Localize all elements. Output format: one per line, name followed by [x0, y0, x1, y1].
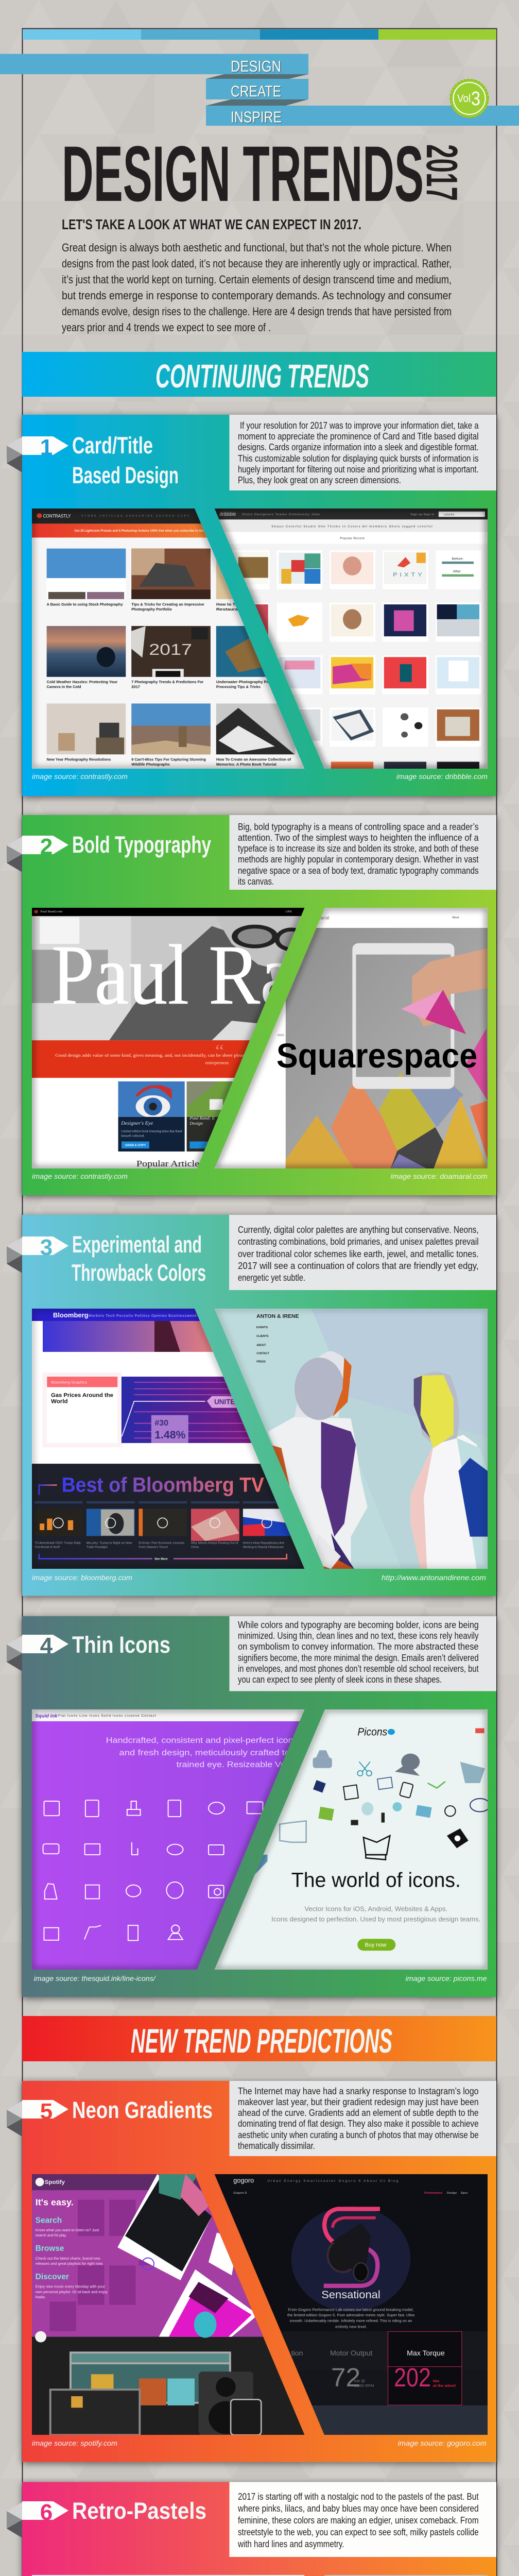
screenshot: contrastly cards: Get 25 Lightroom Presets and 5 Photoshop Actions 100% free when you subscribe to the: [75, 529, 204, 533]
screenshot: picons the world of icons: Vector Icons for iOS, Android, Websites & Apps.: [304, 1905, 447, 1913]
screenshot: bloomberg: Working to Repeal Obamacare: [243, 1546, 284, 1549]
screenshot: anton and irene: ANTON & IRENE: [256, 1313, 299, 1319]
screenshot: gogoro: Spec: [461, 2192, 469, 2195]
screenshot: picons the world of icons: [211, 1709, 490, 1970]
text box 1: Plus, they look great on any screen dimensions.: [238, 475, 401, 485]
screenshot: doamaral squarespace: Work: [452, 917, 459, 920]
arrow: number 5: 5: [40, 2099, 53, 2124]
arrow: number 2: [22, 834, 68, 859]
screenshot: bloomberg: China: [191, 1546, 199, 1549]
banner: continuing trends: [22, 352, 496, 397]
text box 3: energetic yet subtle.: [238, 1273, 305, 1283]
text box 6: where pinks, lilacs, and baby blues may once have been considered: [237, 2503, 479, 2514]
ribbon: design create inspire: DESIGN: [231, 58, 281, 75]
screenshot: bloomberg: [32, 1309, 310, 1569]
screenshot: teletype: [32, 2575, 306, 2576]
text box 3: Currently, digital color palettes are anything but conservative. Neons,: [238, 1225, 479, 1235]
text box 2: [230, 815, 496, 890]
heading 3: Throwback Colors: [72, 1260, 206, 1286]
screenshot: gogoro: From Gogoro Performance Lab comes our latest ground breaking model,: [288, 2307, 414, 2312]
screenshot: gogoro: Nm: [433, 2379, 440, 2383]
screenshot: bloomberg: 1.48%: [154, 1429, 186, 1441]
screenshot: bloomberg: UNITE: [214, 1398, 235, 1406]
arrow: number 4: 4: [40, 1633, 53, 1658]
banner: continuing trends: CONTINUING TRENDS: [155, 358, 369, 395]
text box 5: The Internet may have had a snarky response to Instagram’s logo: [238, 2086, 479, 2096]
text box 4: you can expect to see plenty of sleek icons in these shapes.: [238, 1674, 442, 1685]
text box 3: 2017 will see a continuation of colors that are friendly yet edgy,: [238, 1261, 479, 1271]
arrow: number 3: [22, 1235, 68, 1260]
text box 1: [230, 415, 496, 490]
screenshot: paul rand: himself collected.: [121, 1134, 145, 1138]
arrow: number 6: [22, 2500, 68, 2525]
icon: fold 4: [7, 1636, 22, 1671]
heading 2: Bold Typography: [72, 832, 211, 858]
text box 2: its canvas.: [238, 876, 274, 887]
screenshot: dribbble shots: Popular Recent: [340, 537, 365, 540]
screenshot: dribbble shots: Sign up Sign in: [410, 513, 434, 516]
screenshot: spotify: own personal playlist. Or sit back and enjoy: [36, 2291, 108, 2294]
text box 1: designs. Cards organize information into a sleek and digestible format.: [238, 442, 479, 452]
icon: fold 2: [7, 837, 22, 872]
panel: trend 2 bold typography: [7, 815, 496, 1195]
screenshot: bloomberg: Bloomberg Graphics: [51, 1380, 87, 1384]
screenshot: paul rand: Paul Rand.com: [40, 910, 63, 913]
screenshot: paul rand: entrepreneur.: [205, 1060, 230, 1065]
text box 1: moment to appreciate the prominence of Card and Title based digital: [238, 431, 479, 442]
screenshot: picons the world of icons: Picons: [357, 1725, 387, 1738]
text box 3: over traditional color schemes like earth, jewel, and metallic tones.: [238, 1249, 479, 1259]
text box 4: While colors and typography are becoming bolder, icons are being: [238, 1620, 479, 1630]
screenshot: paul rand: Designer's Eye: [120, 1121, 153, 1126]
screenshot: bloomberg: El-Erian: Five Economic Lessons: [139, 1542, 184, 1545]
text box 6: with hard lines and asymmetry.: [237, 2539, 344, 2549]
screenshot: paul rand: Paul Rand: E: [189, 1116, 215, 1121]
screenshot: spotify: Radio.: [36, 2296, 46, 2299]
arrow: number 4: [22, 1633, 68, 1658]
screenshot: gogoro: Sensational: [321, 2289, 380, 2301]
screenshot: paul rand: “: [215, 1041, 224, 1061]
screenshot: bloomberg: Here's How Republicans Are: [243, 1542, 284, 1545]
heading 5: Neon Gradients: [72, 2097, 213, 2123]
screenshot: paul rand: Design: [189, 1121, 203, 1126]
screenshot: contrastly cards: Processing Tips & Tricks: [216, 685, 261, 689]
screenshot: moglea: [324, 2575, 488, 2576]
text box 5: [230, 2081, 496, 2156]
screenshot: doamaral squarespace: 2016: [278, 1034, 284, 1037]
screenshot: spotify: Premium: [179, 2181, 193, 2184]
screenshot: dribbble shots: Shots Designers Teams Community Jobs: [242, 513, 320, 516]
caption left 5: image source: spotify.com: [32, 2439, 117, 2447]
caption right 2: image source: doamaral.com: [390, 1172, 488, 1180]
screenshot: doamaral squarespace: aral: [320, 916, 329, 921]
screenshot: picons the world of icons: The world of icons.: [291, 1869, 461, 1891]
screenshot: contrastly cards: Photography Portfolio: [131, 607, 172, 612]
screenshot: spotify: Enjoy new music every Monday with your: [36, 2285, 105, 2289]
arrow: number 1: [22, 435, 68, 460]
screenshot: anton and irene: [211, 1309, 489, 1569]
screenshot: paul rand: Popular Article: [136, 1159, 199, 1168]
screenshot: squid ink line icons: Flat Icons Line Icons Solid Icons License Contact: [58, 1714, 156, 1718]
screenshot: dribbble shots: dribbble: [219, 512, 236, 517]
arrow: number 1: 1: [40, 435, 53, 460]
screenshot: bloomberg: World: [51, 1399, 68, 1405]
screenshot: gogoro: [211, 2174, 490, 2435]
title: 2017: [417, 144, 466, 201]
screenshot: spotify: releases and great playlists for right now.: [36, 2262, 103, 2266]
screenshot: paul rand: Paul Ra: [51, 928, 295, 1023]
screenshot: bloomberg: Markets Tech Pursuits Politics Opinion Businessweek: [89, 1314, 197, 1318]
caption right 5: image source: gogoro.com: [398, 2439, 487, 2447]
screenshot: contrastly cards: Wildlife Photographs: [131, 762, 170, 767]
screenshot: contrastly cards: New Year Photography Resolutions: [47, 757, 111, 761]
screenshot: gogoro: smooth. Unbelievably nimble. Infinitely more refined. This is riding on an: [290, 2318, 412, 2323]
screenshot: squid ink line icons: trained eye. Resizeable Ve: [177, 1760, 286, 1769]
heading 1: [72, 432, 179, 488]
text box 2: Big, bold typography is a means of controlling space and a reader’s: [238, 822, 479, 832]
subtitle: LET'S TAKE A LOOK AT WHAT WE CAN EXPECT IN 2017.: [62, 216, 361, 232]
screenshot: contrastly cards: Underwater Photography Post: [216, 680, 273, 684]
screenshot: doamaral squarespace: Squarespace: [276, 1037, 477, 1075]
screenshot: anton and irene: ABOUT: [256, 1344, 266, 1347]
screenshot: bloomberg: Why Money Keeps Flowing Out of: [191, 1542, 238, 1545]
text box 5: dominating trend of flat design. They also make it possible to achieve: [238, 2119, 479, 2129]
screenshot: bloomberg: Bloomberg: [53, 1311, 89, 1319]
intro text: but trends emerge in response to contemporary demands. As technology and consumer: [62, 289, 452, 302]
screenshot: contrastly cards: 2017: [149, 640, 192, 658]
screenshot: spotify: Search: [36, 2216, 62, 2225]
screenshot: gogoro: 72: [331, 2363, 360, 2392]
screenshot: gogoro: kW @: [354, 2379, 365, 2383]
heading 1: Based Design: [72, 462, 179, 488]
screenshot: gogoro: Gogoro S: [233, 2192, 247, 2195]
screenshot: gogoro: tion: [291, 2349, 303, 2357]
screenshot: contrastly cards: How To Create an Awesome Collection of: [216, 757, 291, 761]
screenshot: picons the world of icons: Icons designed to perfection. Used by most prestigious design teams.: [271, 1916, 480, 1923]
icon: fold 5: [7, 2101, 22, 2137]
caption left 2: image source: contrastly.com: [32, 1172, 128, 1180]
screenshot: anton and irene: CONTACT: [256, 1352, 270, 1355]
heading 1: Card/Title: [72, 432, 153, 459]
screenshot: bloomberg: Gas Prices Around the: [51, 1393, 113, 1399]
text box 5: makeover last year, but their gradient redesign may just have been: [238, 2097, 479, 2107]
screenshot: contrastly cards: How to Take: [216, 602, 243, 606]
screenshot: contrastly cards: Camera in the Cold: [47, 685, 81, 689]
caption right 3: http://www.antonandirene.com: [382, 1573, 486, 1582]
text box 4: [230, 1616, 496, 1691]
screenshot: gogoro: Motor Output: [330, 2349, 373, 2357]
screenshot: paul rand: GRAB A COPY: [125, 1144, 146, 1147]
ribbon: design create inspire: [0, 54, 519, 126]
text box 6: streetstyle to the web, you can expect to see soft, milky pastels collide: [238, 2527, 479, 2537]
ribbon: design create inspire: CREATE: [231, 82, 281, 100]
screenshot: paul rand: [32, 908, 308, 1168]
text box 3: [229, 1215, 496, 1290]
arrow: number 6: 6: [40, 2500, 53, 2525]
icon: fold 1: [7, 437, 22, 472]
screenshot: contrastly cards: CONTRASTLY: [43, 514, 71, 519]
screenshot: spotify: [32, 2174, 310, 2435]
text box 2: negative space or a sea of body text, dramatic typography commands: [238, 866, 479, 876]
arrow: number 2: 2: [40, 834, 53, 859]
arrow: number 5: [22, 2099, 68, 2124]
screenshot: bloomberg: #30: [154, 1419, 168, 1428]
icon: fold 3: [7, 1238, 22, 1273]
screenshot: contrastly cards: A Basic Guide to using Stock Photography: [47, 602, 123, 606]
panel: trend 3 experimental and throwback colors: [7, 1215, 496, 1596]
intro text: [62, 241, 452, 334]
text box 5: thematically dissimilar.: [238, 2141, 315, 2151]
text box 1: This customizable solution for displaying quick bursts of information is: [238, 453, 479, 464]
heading 3: Experimental and: [72, 1231, 202, 1258]
text box 6: 2017 is starting off with a nostalgic nod to the pastels of the past. But: [238, 2492, 479, 2502]
screenshot: picons the world of icons: Buy now: [365, 1942, 386, 1948]
text box 2: typeface is to increase its size and bolden its stroke, and both of these: [238, 843, 479, 854]
screenshot: bloomberg: TD Ameritrade CEO: Trump Rally: [34, 1542, 81, 1545]
caption left 4: image source: thesquid.ink/line-icons/: [34, 1974, 157, 1982]
screenshot: anton and irene: CLIENTS: [256, 1335, 269, 1338]
panel: trend 1 card title based design: [7, 415, 496, 796]
screenshot: gogoro: 202: [394, 2363, 431, 2392]
badge: vol 3: 3: [471, 88, 480, 110]
screenshot: dribbble shots: After:: [453, 570, 461, 573]
caption right 1: image source: dribbble.com: [396, 772, 488, 781]
screenshot: gogoro: 5,000 RPM: [354, 2383, 374, 2388]
intro text: years prior and 4 trends we expect to see more of .: [62, 321, 271, 334]
text box 6: [230, 2482, 496, 2557]
screenshot: dribbble shots: Before:: [452, 557, 463, 561]
intro text: Great design is always both aesthetic and functional, but that’s not the whole picture. When: [62, 241, 452, 254]
intro text: it’s just that the world kept on turning. Certain elements of design transcend time and medium,: [62, 273, 452, 286]
arrow: number 3: 3: [40, 1235, 53, 1260]
panel: trend 6 retro pastels: [7, 2482, 496, 2576]
banner: new trend predictions: [22, 2016, 496, 2061]
screenshot: bloomberg: McLarty: Trump Is Right on New: [86, 1542, 132, 1545]
screenshot: paul rand: Good design adds value of some kind, gives meaning, and, not incidentally, can be sheer pleasure: [55, 1053, 251, 1058]
text box 2: attention. Two of the simplest ways to heighten the influence of a: [238, 833, 479, 843]
screenshot: bloomberg: Best of Bloomberg TV: [62, 1473, 265, 1496]
screenshot: contrastly cards: [32, 509, 306, 769]
text box 6: feminine, these colors are making an edgier, unisex comeback. From: [238, 2515, 479, 2526]
screenshot: doamaral squarespace: [212, 908, 491, 1168]
screenshot: spotify: Browse: [36, 2244, 64, 2253]
screenshot: gogoro: entirely new level.: [335, 2324, 367, 2329]
screenshot: spotify: It's easy.: [36, 2197, 74, 2208]
screenshot: anton and irene: EVENTS: [256, 1326, 268, 1329]
screenshot: gogoro: the limited-edition Gogoro S. Pure adrenaline meets style. Super fast. Ultra: [287, 2313, 415, 2317]
text box 1: If your resolution for 2017 was to improve your information diet, take a: [240, 420, 479, 431]
screenshot: gogoro: gogoro: [233, 2177, 254, 2184]
screenshot: spotify: search and hit play.: [36, 2234, 67, 2238]
screenshot: contrastly cards: Cold Weather Hassles: Protecting Your: [47, 680, 117, 684]
text box 5: ahead of the curve. Gradients add an element of subtle depth to the: [238, 2108, 479, 2118]
screenshot: spotify: Know what you want to listen to? Just: [36, 2229, 99, 2232]
screenshot: contrastly cards: 2017: [131, 685, 140, 689]
badge: vol 3: Vol: [457, 93, 471, 105]
screenshot: dribbble shots: colorful: [443, 513, 454, 516]
screenshot: spotify: Spotify: [45, 2179, 65, 2185]
screenshot: squid ink line icons: [32, 1709, 310, 1970]
heading 6: Retro-Pastels: [72, 2498, 206, 2524]
screenshot: squid ink line icons: Handcrafted, consistent and pixel-perfect icons: [106, 1736, 298, 1745]
screenshot: contrastly cards: 9 Can't-Miss Tips For Capturing Stunning: [131, 757, 206, 761]
badge: vol 3: [450, 79, 488, 117]
text box 5: aesthetic unity when curating a bunch of photos that may otherwise be: [238, 2130, 479, 2140]
text box 2: methods are highly popular in contemporary design. Whether in vast: [238, 854, 479, 865]
screenshot: contrastly cards: STORE ARTICLES SUBSCRIBE SEARCH CART: [81, 515, 189, 518]
screenshot: dribbble shots: Shaun Colorful Studio She Thinks in Colors All members Shots tagged colorful: [271, 525, 432, 528]
screenshot: gogoro: Urban Energy Smartscooter Gogoro S About Us Blog: [267, 2179, 399, 2183]
heading 3: [72, 1231, 206, 1286]
screenshot: spotify: Check out the latest charts, brand new: [36, 2257, 101, 2261]
caption left 3: image source: bloomberg.com: [32, 1573, 132, 1582]
screenshot: gogoro: Max Torque: [407, 2349, 445, 2357]
caption right 4: image source: picons.me: [406, 1974, 487, 1982]
panel: trend 5 neon gradients: [7, 2081, 496, 2462]
ribbon: design create inspire: INSPIRE: [231, 108, 282, 126]
header colour bar: [23, 29, 496, 40]
caption left 1: image source: contrastly.com: [32, 772, 128, 781]
screenshot: bloomberg: From Obama's Tenure: [139, 1546, 168, 1549]
screenshot: squid ink line icons: and fresh design, meticulously crafted to o: [119, 1749, 298, 1757]
screenshot: paul rand: Limited edition book featuring items that Rand: [121, 1130, 182, 1133]
screenshot: spotify: Discover: [36, 2273, 69, 2281]
text box 3: contrasting combinations, bold primaries, and unisex palettes prevail: [238, 1236, 479, 1247]
screenshot: gogoro: Design: [447, 2192, 457, 2195]
screenshot: dribbble shots: [212, 509, 490, 771]
screenshot: paul rand: LIFE: [286, 910, 292, 913]
screenshot: gogoro: at the wheel: [433, 2383, 456, 2388]
icon: fold 6: [7, 2502, 22, 2538]
screenshot: contrastly cards: Tips & Tricks for Creating an Impressive: [131, 602, 204, 606]
text box 4: on symbolism to convey information. The more abstracted these: [238, 1641, 479, 1652]
screenshot: contrastly cards: Restaurant: [216, 607, 243, 612]
panel: trend 4 thin icons: [7, 1616, 496, 1997]
screenshot: contrastly cards: 7 Photography Trends & Predictions For: [131, 680, 204, 684]
text box 4: minimized. Using thin, clean lines and no text, these icons rely heavily: [238, 1631, 479, 1641]
screenshot: bloomberg: 'Got Ahead of Itself': [34, 1546, 60, 1549]
screenshot: bloomberg: See More: [154, 1557, 168, 1561]
screenshot: bloomberg: Trade Paradigm: [86, 1546, 108, 1549]
screenshot: contrastly cards: Memories: A Photo Book Tutorial: [216, 762, 276, 767]
screenshot: anton and irene: PRESS: [256, 1361, 266, 1364]
screenshot: gogoro: Performance: [424, 2192, 442, 2195]
screenshot: dribbble shots: PIXTY: [393, 571, 422, 578]
heading 4: Thin Icons: [72, 1632, 170, 1658]
screenshot: squid ink line icons: Squid ink: [35, 1714, 58, 1719]
